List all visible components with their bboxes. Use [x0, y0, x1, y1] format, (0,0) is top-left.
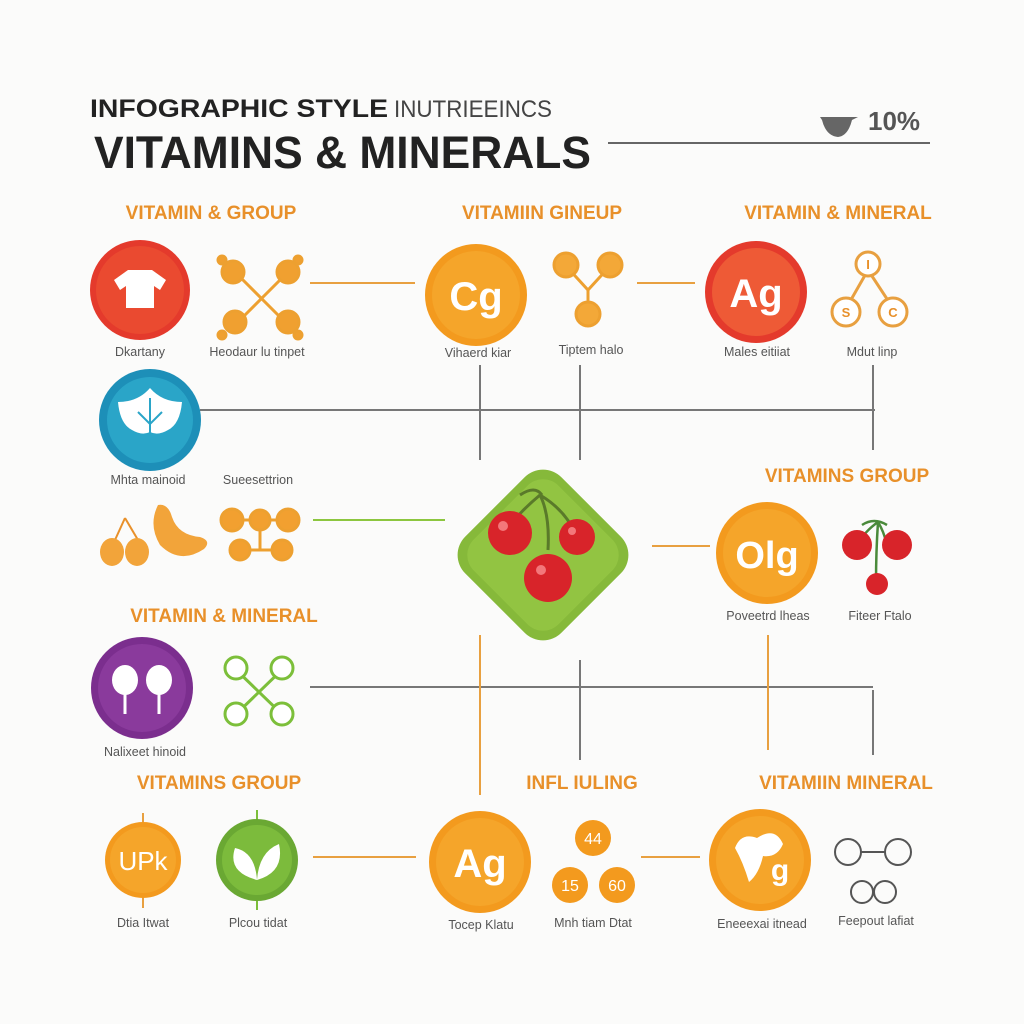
row2 labels [110, 473, 293, 487]
icon: number bubbles: 44 [584, 831, 602, 848]
row1 labels: Heodaur lu tinpet [209, 345, 305, 359]
icon: purple circle [91, 637, 193, 739]
icon: SIC molecule: S [842, 305, 851, 320]
row3 labels: Fiteer Ftalo [848, 609, 912, 623]
icon: red shirt circle [90, 240, 190, 340]
row5 labels: Tocep Klatu [448, 918, 514, 932]
headings: INFL IULING [526, 773, 638, 794]
icon: Olg circle [716, 502, 818, 604]
row3 labels [726, 609, 912, 623]
icon: bowl with percent [820, 106, 920, 137]
icon: Yg orange circle: g [771, 854, 789, 887]
icon: number bubbles: 15 [561, 878, 579, 895]
row5 labels: Feepout lafiat [838, 914, 914, 928]
icon: SIC molecule [832, 252, 907, 326]
row1 labels: Tiptem halo [559, 343, 623, 357]
title: INFOGRAPHIC STYLE [90, 95, 388, 123]
icon: SIC molecule: I [866, 257, 870, 272]
row5 labels: Plcou tidat [229, 916, 288, 930]
icon: number bubbles [552, 820, 635, 903]
icon: gray molecules [835, 839, 911, 903]
row2 labels: Mhta mainoid [110, 473, 186, 487]
icon: UPk circle [105, 813, 181, 908]
icon: Ag red circle [705, 241, 807, 343]
headings: VITAMINS GROUP [765, 466, 929, 487]
icon: Y molecule [554, 253, 622, 326]
icon: Ag red circle: Ag [729, 272, 783, 316]
row5 labels [117, 914, 914, 932]
row1 labels: Dkartany [115, 345, 166, 359]
icon: orange molecule cluster [221, 509, 299, 560]
icon: green molecule X [225, 657, 293, 725]
icon: Cg circle: Cg [449, 275, 503, 319]
headings: VITAMIN & MINERAL [130, 606, 318, 627]
headings: VITAMINS GROUP [137, 773, 301, 794]
headings: VITAMIN & MINERAL [744, 203, 932, 224]
connector lines [200, 283, 875, 857]
title: VITAMINS & MINERALS [94, 127, 591, 178]
icon: bowl with percent: 10% [868, 106, 920, 136]
icon: orange molecule X [218, 256, 302, 339]
icon: green leaf circle [216, 810, 298, 910]
row1 labels: Vihaerd kiar [445, 346, 511, 360]
icon: Yg orange circle [709, 809, 811, 911]
row5 labels: Eneeexai itnead [717, 917, 807, 931]
headings: VITAMIIN MINERAL [759, 773, 933, 794]
row3 labels: Poveetrd lheas [726, 609, 810, 623]
title: INUTRIEEINCS [394, 96, 552, 123]
icon: number bubbles: 60 [608, 878, 626, 895]
headings: VITAMIIN GINEUP [462, 203, 622, 224]
icon: cherries right [842, 521, 912, 595]
row1 labels [115, 343, 897, 360]
icon: Cg circle [425, 244, 527, 346]
icon: Olg circle: Olg [735, 535, 799, 577]
icon: orange fruits [100, 505, 207, 566]
headings [126, 203, 933, 794]
title [90, 95, 591, 178]
icon: UPk circle: UPk [118, 846, 169, 876]
icon: teal leaf circle [99, 369, 201, 471]
row5 labels: Dtia Itwat [117, 916, 170, 930]
row5 labels: Mnh tiam Dtat [554, 916, 632, 930]
row1 labels: Mdut linp [847, 345, 897, 359]
icon: SIC molecule: C [888, 305, 898, 320]
row1 labels: Males eitiiat [724, 345, 791, 359]
headings: VITAMIN & GROUP [126, 203, 297, 224]
row4 label: Nalixeet hinoid [104, 745, 186, 759]
row2 labels: Sueesettrion [223, 473, 293, 487]
icon: Ag orange circle: Ag [453, 842, 507, 886]
icon: Ag orange circle [429, 811, 531, 913]
icon: central green diamond with cherries [447, 459, 639, 651]
